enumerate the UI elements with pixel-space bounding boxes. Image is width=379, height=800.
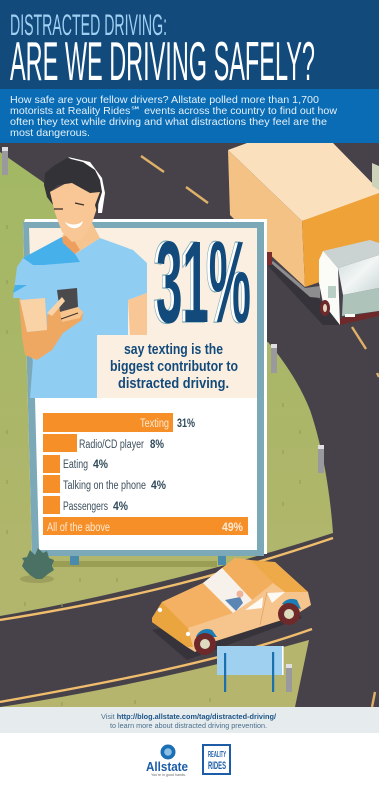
- shirt: [13, 237, 147, 398]
- left arm: [19, 298, 83, 360]
- billboard frame: [23, 219, 267, 556]
- thumb: [47, 297, 65, 316]
- big statistic 31%: [153, 217, 251, 347]
- truck box side: [228, 150, 305, 287]
- bar: passengers: Passengers: [63, 501, 108, 513]
- statistic caption: say texting is the: [124, 341, 223, 358]
- shirt shadow: [23, 237, 80, 265]
- bar: texting: 31%: [177, 418, 195, 430]
- Reality Rides logo: REALITY: [208, 750, 226, 759]
- footer text: to learn more about distracted driving prevention.: [110, 723, 267, 730]
- statistic caption: distracted driving.: [118, 375, 229, 392]
- header panel: [0, 0, 379, 92]
- road sign: [217, 646, 284, 692]
- phone: [57, 288, 78, 312]
- car trunk: [250, 560, 308, 592]
- intro paragraph: most dangerous.: [10, 127, 90, 139]
- intro paragraph: [10, 94, 337, 139]
- upper grass: [0, 152, 333, 616]
- bar: talking on the phone: Talking on the phone: [63, 480, 146, 492]
- billboard: [23, 217, 267, 567]
- bar: all of the above: All of the above: [47, 522, 110, 534]
- billboard support shadow: [53, 561, 217, 567]
- billboard white chart panel: [35, 398, 257, 550]
- intro paragraph: motorists at Reality Rides℠ events across the country to find out how: [10, 105, 337, 117]
- Reality Rides logo: [203, 745, 230, 774]
- headlights: [158, 608, 190, 636]
- statistic caption: biggest contributor to: [110, 358, 238, 375]
- header panel: DISTRACTED DRIVING:: [10, 9, 167, 42]
- Allstate logo: You're in good hands.: [151, 773, 186, 777]
- truck bumper strip: [271, 261, 320, 298]
- side windows: [245, 597, 263, 610]
- bar: texting: Texting: [140, 418, 169, 430]
- car shadow: [152, 600, 302, 660]
- hair highlight: [68, 157, 105, 213]
- billboard legs: [70, 555, 79, 565]
- bar: talking on the phone: 4%: [151, 480, 166, 492]
- neck: [62, 223, 100, 254]
- footer text: [101, 714, 276, 730]
- door line: [260, 592, 267, 625]
- truck box rear: [302, 193, 379, 287]
- bar: talking on the phone: [43, 475, 166, 493]
- bar: all of the above: 49%: [222, 522, 243, 534]
- upper arm highlight: [20, 298, 47, 332]
- Allstate logo: [146, 744, 188, 777]
- bar: passengers: [43, 496, 128, 514]
- bar: texting: [43, 413, 195, 432]
- smile: [65, 221, 83, 228]
- grass ticks: [7, 225, 300, 706]
- billboard cream panel: [29, 228, 257, 398]
- bar: radio: 8%: [150, 439, 164, 451]
- footer text: Visit http://blog.allstate.com/tag/distracted-driving/: [101, 714, 276, 721]
- roadside posts: [2, 147, 324, 692]
- right arm: [128, 293, 147, 335]
- eyes: [54, 203, 84, 209]
- fingers: [60, 307, 83, 322]
- billboard: 31%: [153, 217, 248, 347]
- bar: eating: 4%: [93, 459, 108, 471]
- road scene illustration: [0, 143, 379, 707]
- bar: eating: [43, 455, 108, 473]
- bar: all of the above: [43, 517, 248, 535]
- delivery truck: [228, 143, 379, 325]
- car roof: [222, 558, 273, 600]
- windshield and driver: [203, 568, 252, 613]
- bar: radio: Radio/CD player: [79, 439, 144, 451]
- man texting: [13, 157, 147, 398]
- road edge line upper: [0, 538, 333, 620]
- bar: passengers: 4%: [113, 501, 128, 513]
- orange car: [152, 558, 311, 660]
- bar: eating: Eating: [63, 459, 88, 471]
- bar: radio: [43, 434, 164, 452]
- statistic caption: [97, 335, 257, 398]
- Allstate logo: Allstate: [146, 760, 188, 774]
- bush: [20, 548, 54, 583]
- car body: [152, 558, 311, 652]
- intro paragraph: How safe are your fellow drivers? Allstate polled more than 1,700: [10, 94, 319, 106]
- front wheel: [194, 629, 217, 655]
- bar chart: [43, 413, 248, 535]
- lower grass: [0, 640, 309, 707]
- face: [50, 180, 100, 242]
- intro paragraph: often they text while driving and what distractions they feel are the: [10, 116, 327, 128]
- road edge line lower: [0, 629, 312, 702]
- rear wheel: [278, 599, 301, 625]
- car hood: [162, 583, 233, 628]
- footer link band: [0, 707, 379, 733]
- truck shadow: [268, 263, 340, 325]
- lane dashes: [141, 156, 379, 707]
- car front: [152, 602, 193, 647]
- hair: [44, 158, 102, 212]
- truck cab: [319, 240, 379, 325]
- Reality Rides logo: RIDES: [208, 760, 226, 772]
- intro text panel: [0, 89, 379, 143]
- truck box top: [228, 143, 379, 221]
